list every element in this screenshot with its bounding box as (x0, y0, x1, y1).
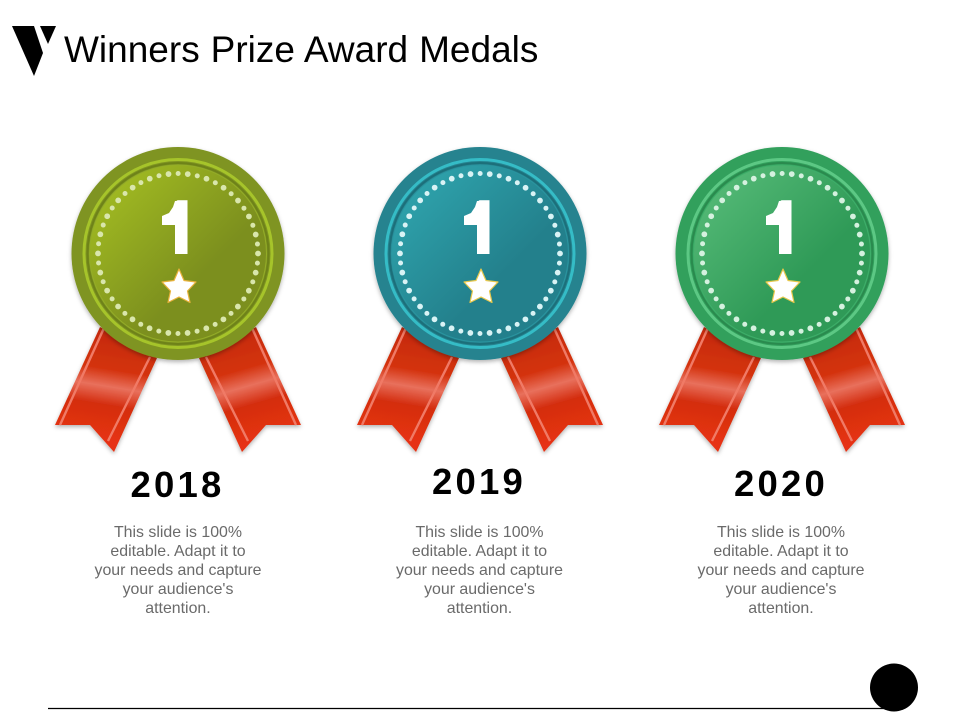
text block: 2019: your audience's (424, 581, 535, 598)
star: 2018 medal (162, 269, 196, 302)
text block: 2020: This slide is 100% (717, 524, 845, 541)
medal disc: 2018 (72, 147, 284, 360)
logo (12, 26, 56, 76)
text block: 2019: attention. (447, 600, 512, 617)
text block: 2019 (396, 524, 563, 617)
ribbons: 2020 (659, 327, 905, 452)
text block: 2018 (95, 524, 262, 617)
medal: 2020 (659, 147, 905, 452)
text block: 2018: attention. (145, 600, 211, 617)
text block: 2019: This slide is 100% (415, 524, 544, 541)
number: 2020 medal (766, 200, 792, 254)
year: 2020: 2020 (734, 463, 828, 504)
star: 2020 medal (766, 269, 800, 302)
text block: 2020 (698, 524, 865, 617)
text block: 2020: attention. (748, 600, 814, 617)
medal: 2019 (357, 147, 603, 452)
number: 2018 medal (162, 200, 188, 254)
text block: 2018: your audience's (123, 581, 233, 598)
text block: 2018: This slide is 100% (114, 524, 242, 541)
text block: 2019: editable. Adapt it to (412, 543, 547, 560)
ribbons: 2018 (55, 327, 301, 452)
text block: 2018: your needs and capture (95, 562, 262, 579)
year: 2018: 2018 (130, 464, 224, 505)
medal: 2018 (55, 147, 301, 452)
text block: 2020: your needs and capture (698, 562, 865, 579)
ribbons: 2019 (357, 327, 603, 452)
text block: 2020: editable. Adapt it to (713, 543, 849, 560)
year: 2019: 2019 (432, 461, 526, 502)
number: 2019 medal (464, 200, 490, 254)
number: 2019 medal: 1 (461, 183, 504, 271)
number: 2018 medal: 1 (159, 183, 202, 271)
medal disc: 2019 (374, 147, 586, 360)
text block: 2018: editable. Adapt it to (110, 543, 246, 560)
title: Winners Prize Award Medals (64, 29, 538, 70)
text block: 2019: your needs and capture (396, 562, 563, 579)
page number circle (870, 664, 918, 712)
star: 2019 medal (464, 269, 498, 302)
text block: 2020: your audience's (726, 581, 836, 598)
number: 2020 medal: 1 (763, 183, 806, 271)
medal disc: 2020 (676, 147, 888, 360)
